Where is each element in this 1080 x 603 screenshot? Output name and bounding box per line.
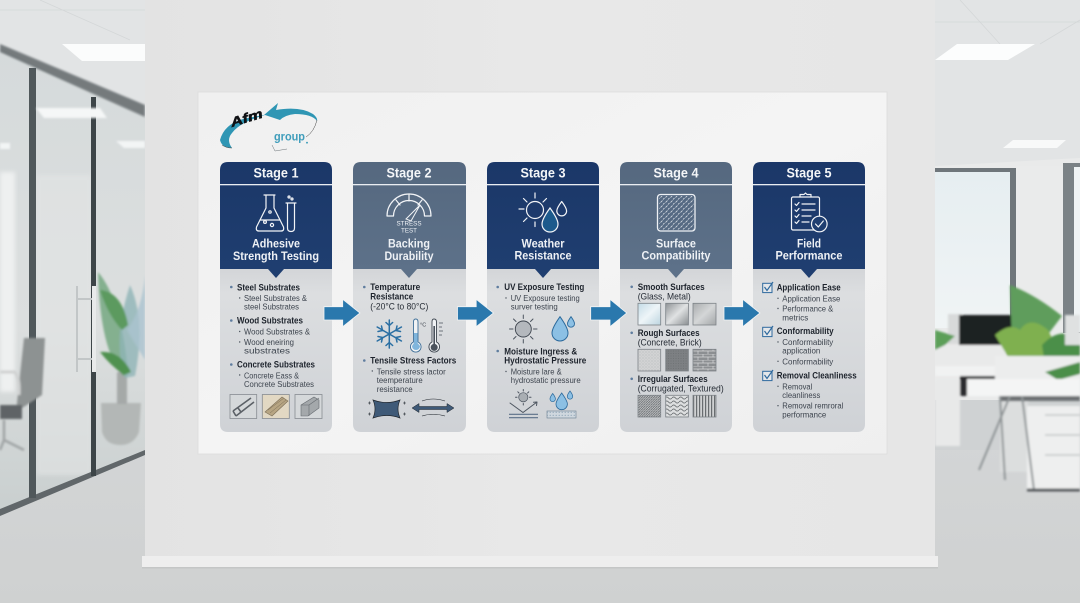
icon: hydrostatic drops on layer [547,391,576,418]
stage 5 title: Field [797,238,821,250]
icon: steel, wood and concrete samples [230,394,322,418]
stage 5 list: removal cleanliness: performance [782,409,826,419]
stage 3 list: moisture ingress: hydrostatic pressure [511,375,581,385]
stage 4 list: irregular surfaces: Irregular Surfaces [638,374,708,385]
stage 2 list: tensile stress [363,356,456,394]
stage 4 title: Surface [656,238,696,250]
logo: Afm group [220,103,317,151]
stage 3 list: moisture ingress [496,346,586,385]
stage 5 list: removal cleanliness [763,370,857,419]
stage 5 list: conformability: application [782,346,820,356]
stage 1 list: Wood eneiring [244,337,294,347]
stage 5 list: removal cleanliness: Removal Cleanliness [777,370,857,381]
stage 5 title [776,238,842,263]
stage 5 list: conformability: Conformability [782,337,834,347]
icon: stress test gauge: TEST [401,228,417,234]
stage 5 list: conformability [763,326,834,366]
stage 1 list: substrates [244,346,290,356]
display board [198,92,887,454]
background: chair behind glass [0,338,45,450]
stage 3 list: UV exposure: surver testing [511,302,558,312]
stage 2 title: Durability [384,251,434,263]
stage 3 title [514,238,572,263]
icon: textured surface square [658,194,695,231]
stage 5 list: application ease: metrics [782,312,808,322]
panel: stage 2 backing durability [353,162,466,432]
stage 4 list: irregular surfaces [630,374,724,417]
arrow: stage 1 to stage 2 [324,299,360,327]
stage 4 list: smooth surfaces: Smooth Surfaces [638,282,705,293]
stage 5 list: removal cleanliness: cleanliness [782,390,820,400]
background: left ceiling lights [0,44,145,149]
stage 5 list: conformability: Conformability [777,326,834,337]
icon: stress test gauge: STRESS [396,221,422,228]
stage 3 heading: Stage 3 [520,164,566,180]
icon: snowflake [377,320,401,348]
stage 1 list: Wood Substrates & [244,327,310,337]
icon: sun and water drops [519,193,567,232]
stage 4 list: smooth surfaces [630,282,716,325]
stage 2 list: temperature: Temperature [370,282,420,293]
background: right ceiling lights [935,44,1066,148]
stage 5 heading: Stage 5 [786,164,832,180]
stage 2 list: tensile stress: Tensile Stress Factors [370,356,456,367]
stage 5 list: removal cleanliness: Removal [782,381,812,391]
stage 2 list: tensile stress: resistance [377,384,413,394]
stage 5 list: application ease: Application Ease [777,282,841,293]
background: potted plant behind glass [98,272,145,445]
stage 1 title [233,238,319,263]
arrow: stage 4 to stage 5 [724,299,760,327]
stage 1 list: Steel Substrates [237,282,300,294]
stage 1 list: Steel Substrates & [244,293,307,303]
stage 1 list [230,282,315,389]
logo: Afm group: group [274,130,305,144]
stage 1 list: steel Substrates [244,302,299,312]
arrow: stage 2 to stage 3 [458,299,494,327]
icon: clipboard checklist [792,193,827,232]
stage 1 list: Concrete Eass & [244,370,299,380]
stage 1 list: Concrete Substrates [237,360,315,371]
stage 4 list: rough surfaces: Rough Surfaces [638,328,700,339]
stage 2 list: temperature: (-20°C to 80°C) [370,300,428,311]
stage 4 list: rough surfaces [630,328,716,371]
stage 5 list: application ease: Application Ease [782,293,840,303]
stage 5 list: conformability: Conformability [782,356,834,366]
stage 2 list: temperature: Resistance [370,292,413,303]
panel: stage 3 weather resistance [487,162,599,432]
stage 3 title: Weather [522,238,565,250]
arrow: stage 3 to stage 4 [591,299,627,327]
icon: blue drops [552,317,574,341]
stage 1 heading: Stage 1 [254,164,299,180]
stage 1 title: Strength Testing [233,251,319,263]
stage 4 list: irregular surfaces: (Corrugated, Textured) [638,383,724,394]
stage 2 list: tensile stress: teemperature [377,375,423,385]
panel: stage 5 field performance [753,162,865,432]
stage 4 title: Compatibility [642,251,711,263]
stage 1 list: Wood Substrates [237,316,303,327]
icon: thermometers: °C [420,322,426,328]
icon: tensile stretched sheet and arrows [368,399,454,418]
stage 5 list: application ease: Performance & [782,304,834,314]
stage 5 title: Performance [776,251,842,263]
background: left glass partition [0,44,145,516]
stage 3 title: Resistance [514,251,572,263]
stage 3 list: UV exposure: UV Exposure testing [511,293,580,303]
stage 2 heading: Stage 2 [386,164,432,180]
stage 3 list: UV exposure [496,282,584,312]
stage 5 list: removal cleanliness: Removal remroral [782,401,843,411]
stage 4 list: rough surfaces: (Concrete, Brick) [638,337,702,348]
logo: Afm group: Afm [227,106,265,130]
icon: flask and test tube [256,195,296,232]
stage 2 list: temperature [363,282,428,311]
stage 4 heading: Stage 4 [654,164,699,180]
background: right office window and wall [935,158,1080,450]
stage 3 list: moisture ingress: Moisture Ingress & [504,346,577,357]
stage 4 title [642,238,711,263]
wall with display board mounted [142,0,938,568]
panel: stage 4 surface compatibility [620,162,732,432]
stage 3 list: UV exposure: UV Exposure Testing [504,282,584,293]
stage 5 list: application ease [763,282,841,322]
icon: grey sun [510,315,537,343]
stage 3 list: moisture ingress: Moisture lare & [511,367,562,377]
stage 4 list: smooth surfaces: (Glass, Metal) [638,291,691,302]
icon: UV reflection on surface [509,390,538,418]
stage 2 list: tensile stress: Tensile stress lactor [377,366,446,376]
panel: stage 1 adhesive strength testing [220,162,332,432]
icon: thermometers [410,319,443,352]
stage 1 list: Concrete Substrates [244,379,314,389]
stage 2 title [384,238,434,263]
stage 2 title: Backing [388,238,430,250]
stage 3 list: moisture ingress: Hydrostatic Pressure [504,356,586,367]
stage 1 title: Adhesive [252,238,300,250]
icon: stress test gauge [387,194,431,234]
background: right desks, monitor and plants [935,285,1080,490]
